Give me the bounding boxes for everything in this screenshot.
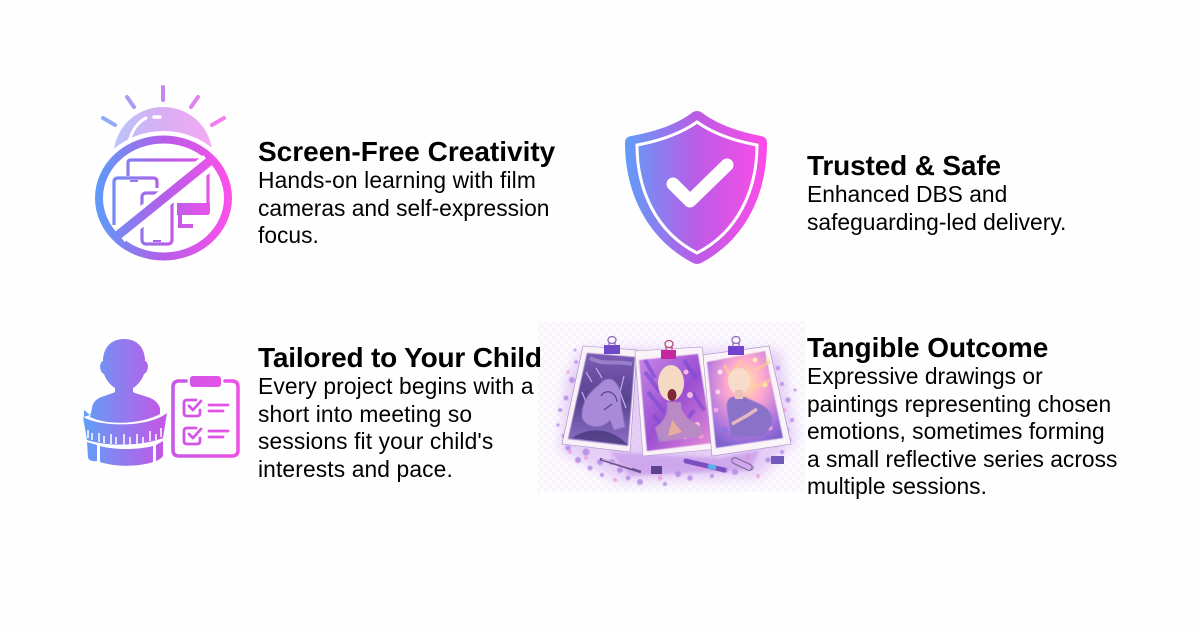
body: Every project begins with a <box>258 373 534 399</box>
body <box>807 181 1066 235</box>
painting: curled figure in storm <box>562 346 637 452</box>
body <box>258 167 549 248</box>
body: focus. <box>258 222 319 248</box>
icon: shield with check mark <box>625 111 767 264</box>
text: Tangible Outcome <box>807 332 1117 499</box>
icon: no screens under a light dome <box>95 85 232 260</box>
heading: Screen-Free Creativity <box>258 136 555 167</box>
heading: Tailored to Your Child <box>258 342 542 373</box>
lower body <box>87 441 163 466</box>
text: Screen-Free Creativity <box>258 136 555 248</box>
body: a small reflective series across <box>807 446 1117 472</box>
body: paintings representing chosen <box>807 390 1111 416</box>
text: Trusted & Safe <box>807 150 1066 235</box>
body: interests and pace. <box>258 456 453 482</box>
body: multiple sessions. <box>807 473 987 499</box>
text: Tailored to Your Child <box>258 342 542 482</box>
body: Enhanced DBS and <box>807 181 1007 207</box>
body <box>807 363 1117 499</box>
body: sessions fit your child's <box>258 428 493 454</box>
painting: figure with hands on heart <box>703 346 791 456</box>
tape measure <box>83 410 167 445</box>
body: short into meeting so <box>258 400 472 426</box>
body: Expressive drawings or <box>807 363 1043 389</box>
body: emotions, sometimes forming <box>807 418 1105 444</box>
art supplies <box>600 454 784 474</box>
child silhouette <box>90 339 160 423</box>
binder clips <box>604 336 744 359</box>
heading: Tangible Outcome <box>807 332 1048 363</box>
body: cameras and self-expression <box>258 194 549 220</box>
body <box>258 373 534 482</box>
heading: Trusted & Safe <box>807 150 1001 181</box>
body: Hands-on learning with film <box>258 167 536 193</box>
paint splatter <box>556 349 796 486</box>
painting: screaming figure <box>635 347 717 456</box>
body: safeguarding-led delivery. <box>807 208 1066 234</box>
clipboard <box>173 381 238 456</box>
icon: measured child and checklist <box>83 339 240 466</box>
illustration: three emotion paintings clipped in a row <box>537 321 805 492</box>
